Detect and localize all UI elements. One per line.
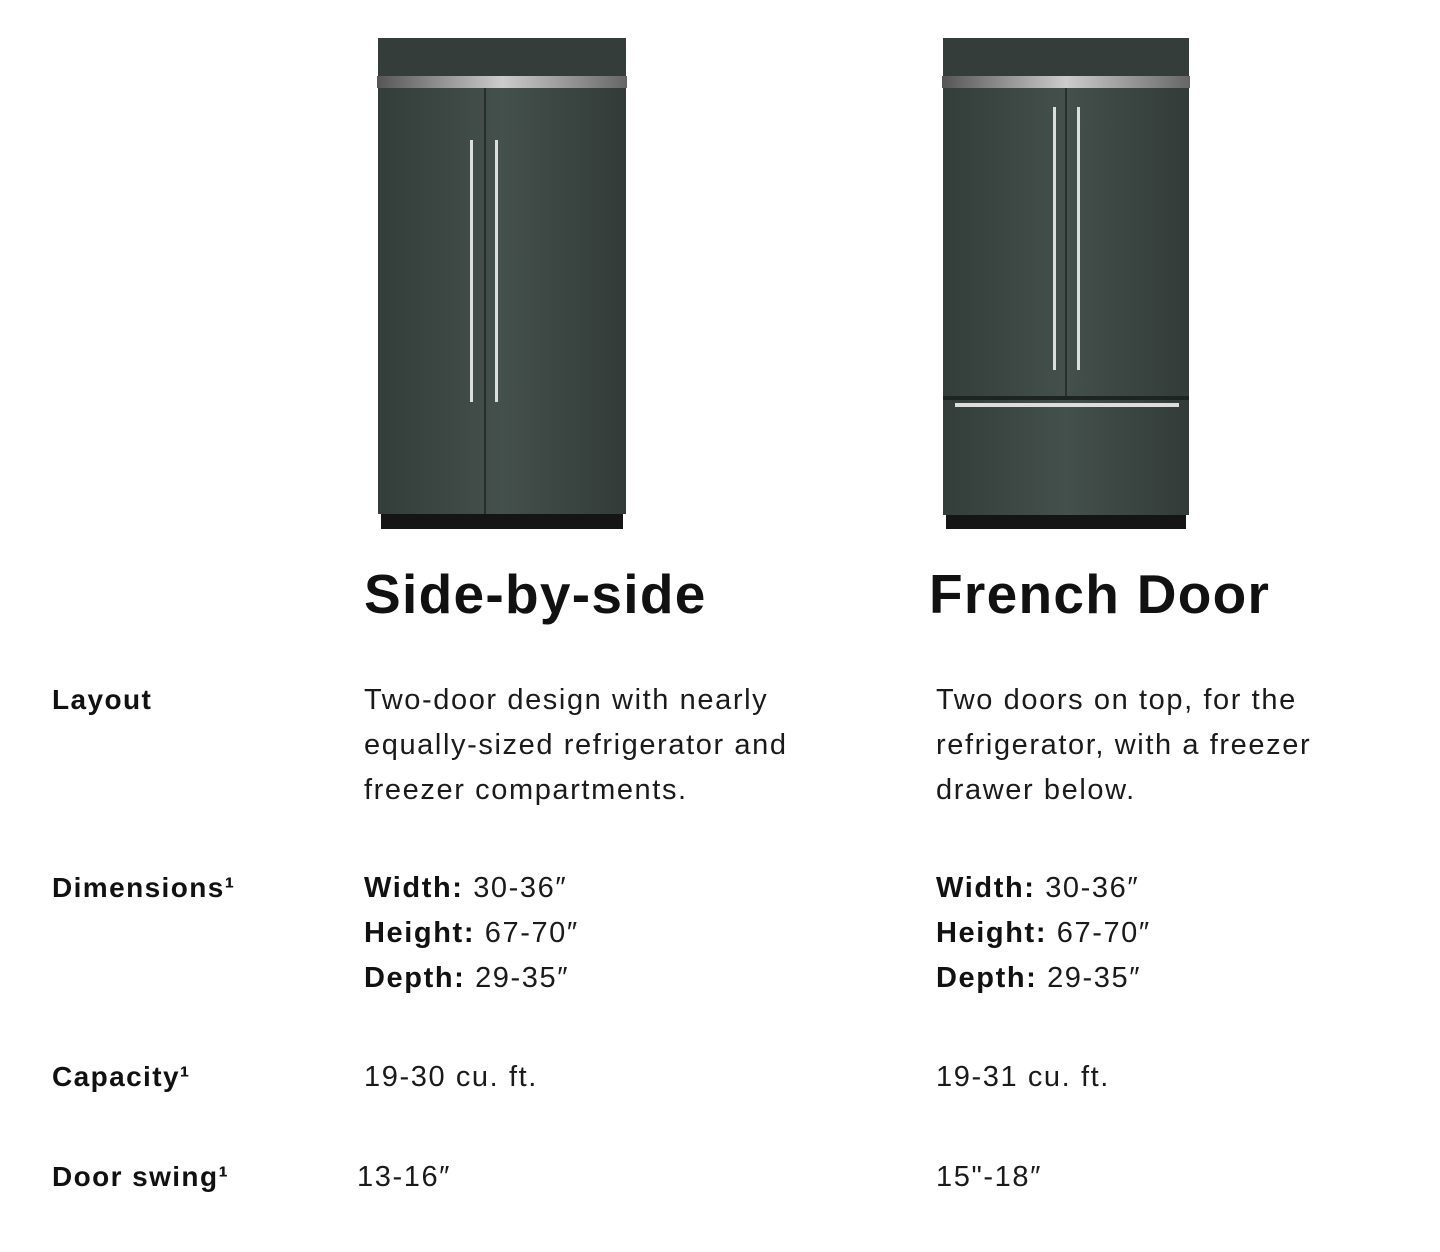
label: layout: Layout [52,684,152,715]
text: door swing side-by-side: 13-16″ [357,1161,451,1193]
title: french door: French Door [929,563,1270,625]
label: dimensions: Dimensions¹ [52,872,235,903]
text: dimensions french door: Width: 30-36″ [936,872,1139,904]
text: dimensions side-by-side: Width: 30-36″ [364,872,567,904]
text: layout french door: refrigerator, with a freezer [936,729,1311,761]
title: side-by-side: Side-by-side [364,563,707,625]
fridge: side-by-side [377,38,627,529]
label: door swing: Door swing¹ [52,1161,229,1192]
text: dimensions side-by-side [364,872,579,994]
text: dimensions french door: Height: 67-70″ [936,917,1151,949]
text: door swing french door: 15"-18″ [936,1161,1042,1193]
label: capacity: Capacity¹ [52,1061,191,1092]
text: capacity side-by-side: 19-30 cu. ft. [364,1061,538,1093]
text: layout french door [936,684,1311,806]
text: layout french door: Two doors on top, for the [936,684,1297,716]
text: capacity french door: 19-31 cu. ft. [936,1061,1110,1093]
text: dimensions french door [936,872,1151,994]
text: layout side-by-side: freezer compartments. [364,774,688,806]
fridge: french door [942,38,1190,529]
text: layout side-by-side: Two-door design with nearly [364,684,768,716]
text: layout french door: drawer below. [936,774,1136,806]
text: dimensions side-by-side: Depth: 29-35″ [364,962,569,994]
text: dimensions side-by-side: Height: 67-70″ [364,917,579,949]
text: layout side-by-side: equally-sized refrigerator and [364,729,788,761]
text: dimensions french door: Depth: 29-35″ [936,962,1141,994]
text: layout side-by-side [364,684,788,806]
